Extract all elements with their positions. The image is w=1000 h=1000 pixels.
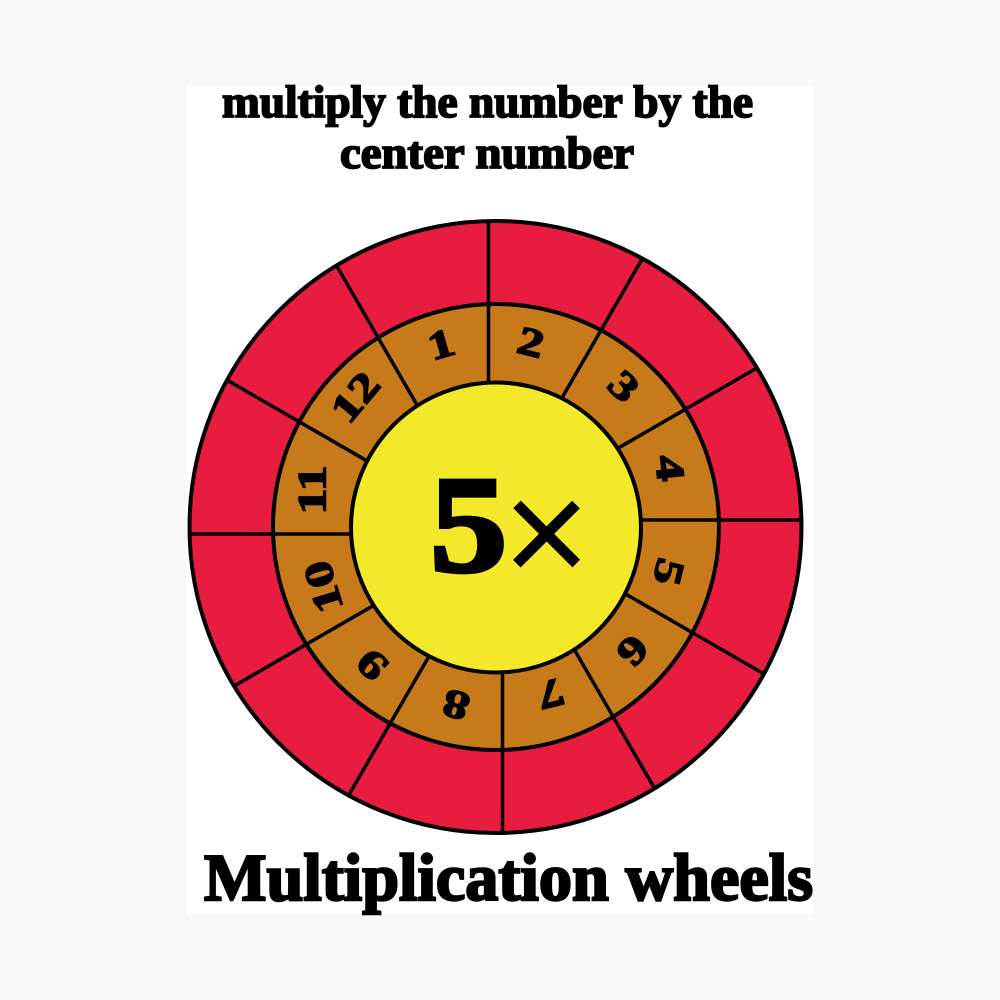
segment numbers 1 to 12: 8 xyxy=(438,679,475,729)
segment numbers 1 to 12: 6 xyxy=(607,626,657,675)
segment numbers 1 to 12: 10 xyxy=(295,555,353,618)
segment numbers 1 to 12: 7 xyxy=(533,669,569,718)
segment numbers 1 to 12: 3 xyxy=(599,362,648,412)
center circle: yellow xyxy=(351,382,641,672)
middle ring: ochre number segments xyxy=(272,304,719,750)
white poster panel xyxy=(186,85,813,915)
segment numbers 1 to 12: 12 xyxy=(322,364,389,432)
segment numbers 1 to 12: 2 xyxy=(513,318,549,367)
center label: 5 times: 5 xyxy=(430,448,507,601)
segment numbers 1 to 12: 11 xyxy=(291,465,335,515)
title: Multiplication wheels: Multiplication wheels xyxy=(204,841,813,915)
heading: instruction: center number xyxy=(340,128,634,178)
segment numbers 1 to 12: 1 xyxy=(423,320,460,370)
segment numbers 1 to 12: 4 xyxy=(646,453,692,483)
heading: instruction xyxy=(222,77,753,178)
center label: 5 times: × xyxy=(503,448,590,616)
heading: instruction: multiply the number by the xyxy=(222,77,753,127)
segment numbers 1 to 12 xyxy=(291,318,693,729)
segment numbers 1 to 12: 9 xyxy=(348,639,397,689)
center label: 5 times xyxy=(430,448,590,616)
segment numbers 1 to 12: 5 xyxy=(644,554,693,590)
outer ring: red answer segments xyxy=(190,221,802,833)
multiplication wheel xyxy=(190,221,802,833)
